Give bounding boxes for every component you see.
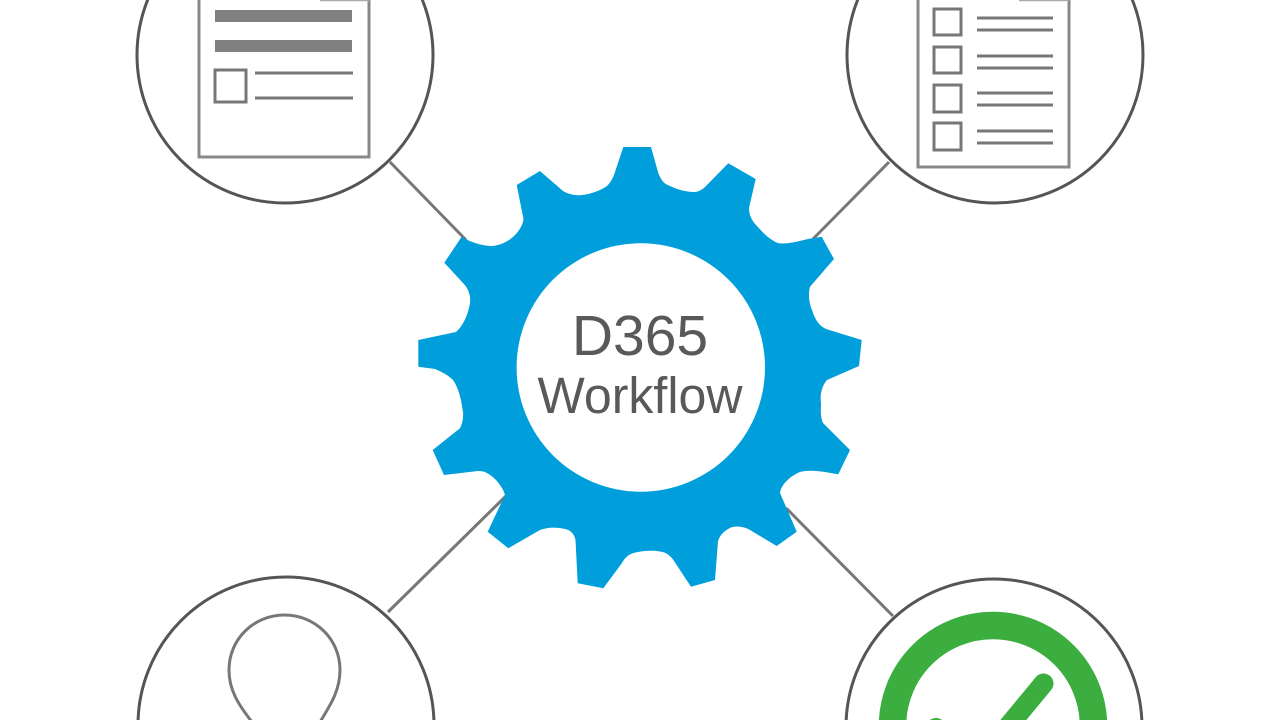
connector: top right [812,162,889,240]
gear label [538,304,743,424]
node: approved check [846,579,1142,720]
connector: bottom left [388,496,506,612]
gear [418,147,862,588]
gear label: D365 [572,304,708,368]
node: checklist document [847,0,1143,203]
node: form document [137,0,433,203]
connector: bottom right [786,508,893,616]
node: person [138,577,434,720]
connector: top left [390,162,466,240]
gear label: Workflow [538,367,743,424]
